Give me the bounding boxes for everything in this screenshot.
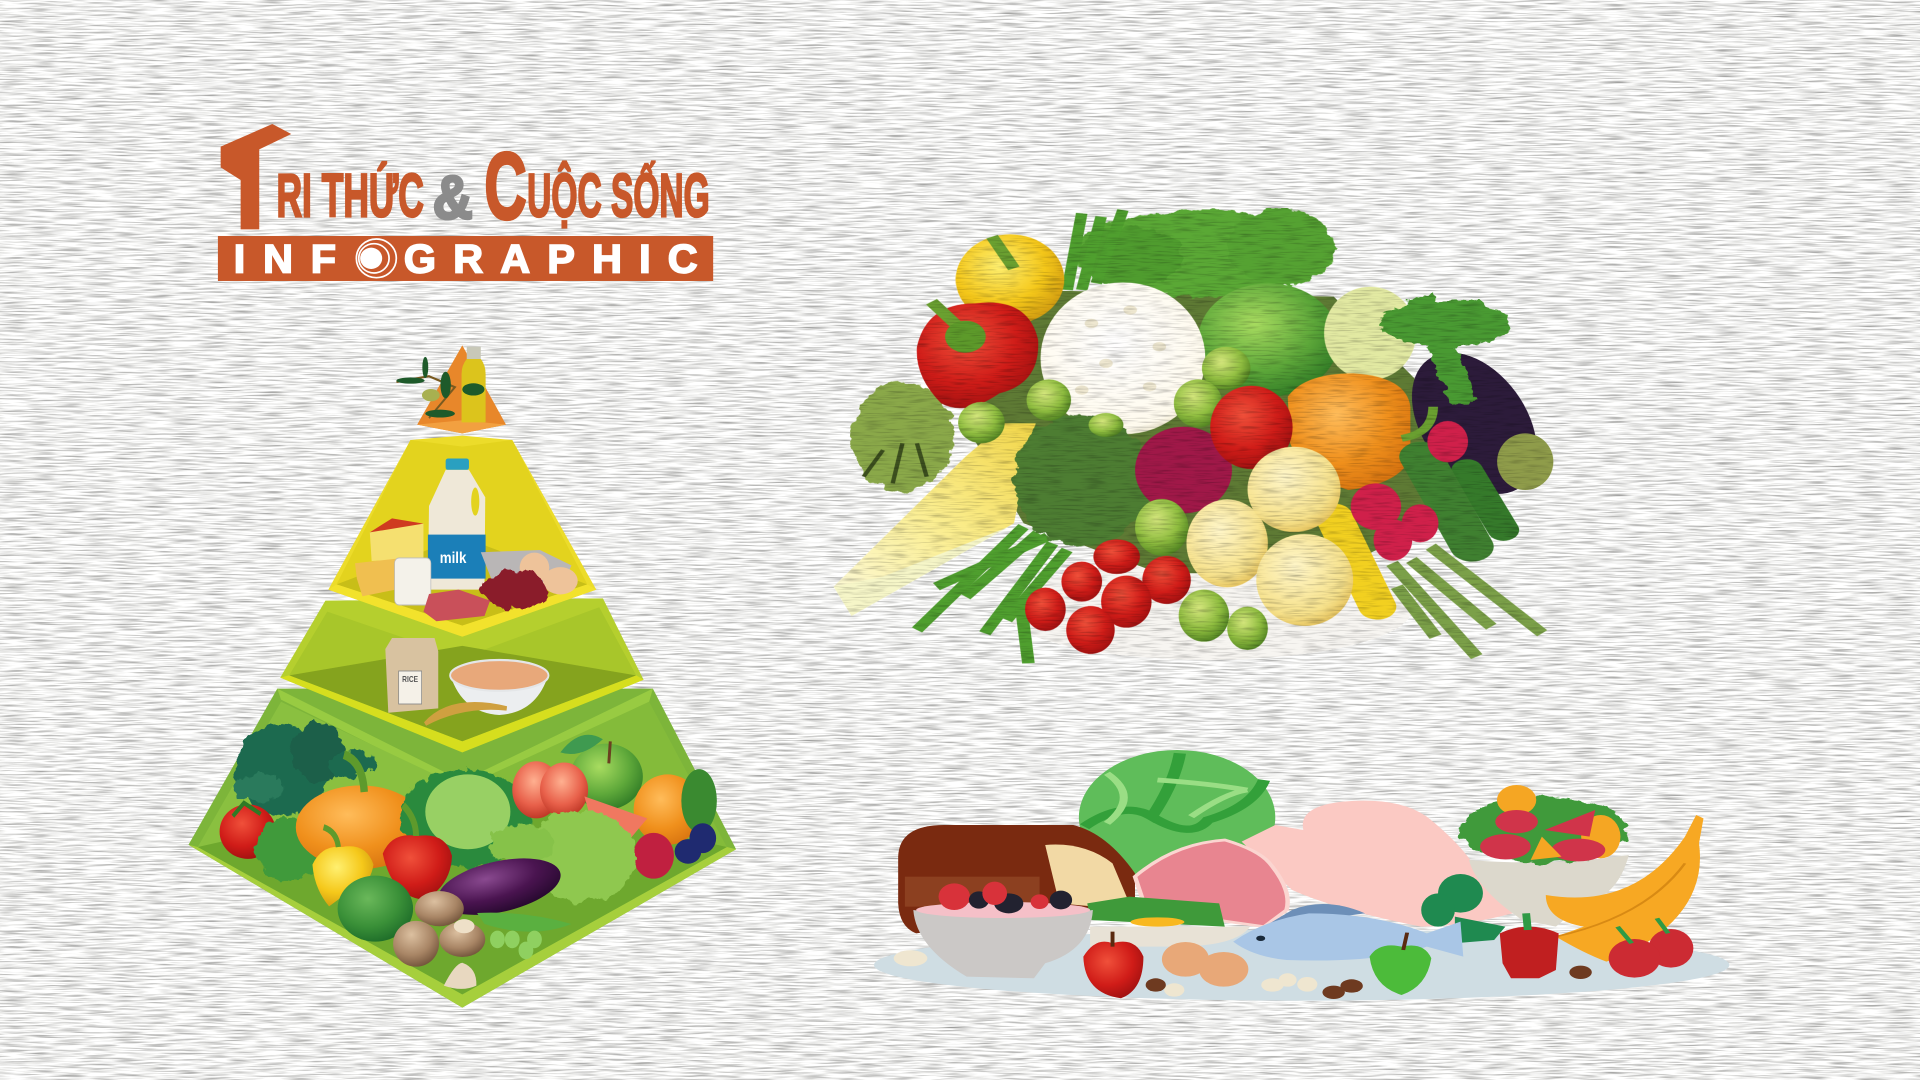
icon: green stalks: [1067, 210, 1123, 290]
icon: yellow squash: [1334, 517, 1377, 607]
icon: green pepper: [338, 876, 413, 942]
icon: orange: [634, 774, 702, 845]
icon: eggs: [520, 553, 578, 594]
icon: meat: [423, 590, 490, 621]
icon: cauliflower: [1041, 282, 1205, 434]
icon: mushrooms: [393, 891, 485, 989]
icon: asparagus: [1392, 547, 1542, 657]
icon: artichoke: [852, 382, 953, 492]
logo letter T: [221, 124, 291, 229]
icon: grapefruit: [584, 796, 647, 845]
icon: eggplant: [1388, 342, 1560, 505]
icon: bananas: [1546, 815, 1703, 962]
icon: eggplant calyx: [1497, 433, 1553, 490]
icon: beans: [482, 570, 547, 609]
icon: tomato: [220, 803, 276, 859]
band text: GRAPHIC: GRAPHIC: [404, 236, 698, 281]
icon: spiral O: [356, 239, 396, 278]
icon: potatoes: [1186, 447, 1353, 626]
icon: wheat: [425, 704, 507, 724]
icon: pumpkin: [296, 755, 425, 869]
infographic band: [218, 236, 713, 281]
logo ampersand: &: [433, 163, 473, 232]
icon: bread loaf: [898, 825, 1135, 933]
shadow under pile: [1004, 560, 1411, 660]
icon: raspberry: [633, 833, 674, 879]
band text: INF: INF: [234, 236, 336, 281]
pyramid tier: vegetables and fruit: [188, 689, 736, 1008]
icon: red pepper: [383, 805, 452, 900]
icon: rice bag: [385, 638, 438, 713]
icon: chicken: [1242, 801, 1525, 927]
icon: red onion: [1135, 427, 1232, 513]
icon: red bell pepper: [1500, 913, 1559, 978]
pyramid tier: oils: [396, 345, 506, 433]
icon: rice bag: RICE: [402, 674, 418, 684]
icon: peas: [477, 913, 571, 959]
icon: kale: [233, 722, 374, 816]
icon: eggs: [1162, 942, 1248, 987]
icon: fish: [1233, 904, 1463, 961]
icon: cabbage: [399, 770, 533, 867]
icon: meat: [1135, 840, 1288, 927]
icon: cherry tomatoes: [1025, 539, 1191, 654]
icon: oil bottle: [462, 347, 486, 422]
icon: savoy cabbage: [1198, 283, 1339, 397]
icon: red pepper: [917, 302, 1038, 408]
icon: yellow pepper: [312, 827, 374, 906]
icon: salad bowl: [1460, 785, 1629, 927]
icon: cucumbers: [1421, 457, 1503, 547]
icon: tomato: [1210, 386, 1293, 469]
icon: eggplant: [434, 849, 564, 925]
icon: broccoli: [1014, 413, 1150, 547]
icon: yellow pepper: [956, 234, 1064, 324]
pyramid tier: grains: [280, 598, 644, 752]
logo letter C: C: [484, 134, 526, 239]
icon: blueberries: [675, 823, 716, 864]
icon: kohlrabi: [1324, 287, 1416, 380]
icon: egg plate: [1087, 897, 1250, 947]
icon: lettuce: [488, 810, 636, 902]
icon: apple: [560, 735, 643, 810]
icon: corn: [834, 423, 1036, 616]
healthy food spread illustration: [874, 750, 1729, 1001]
icon: radishes: [1351, 421, 1468, 561]
icon: cheese: [370, 518, 423, 561]
pile backing fill: [961, 290, 1431, 573]
icon: leaf: [681, 769, 717, 832]
icon: broccoli: [255, 818, 323, 880]
icon: green beans: [917, 527, 1067, 663]
logo: Tri Thức & Cuộc Sống Infographic: [218, 124, 713, 281]
logo text: RI THỨC: RI THỨC: [276, 162, 424, 230]
vegetable pile photo: [834, 208, 1560, 663]
icon: milk jug: milk: [440, 550, 467, 568]
icon: rice bowl: [450, 660, 549, 715]
food pyramid: [188, 345, 736, 1008]
icon: lettuce back: [1072, 208, 1334, 297]
icon: nuts: [894, 950, 1592, 999]
icon: brussels sprouts: [958, 347, 1268, 650]
plate: [874, 929, 1729, 1001]
icon: fish fillet: [481, 550, 571, 590]
icon: orange pepper: [1288, 373, 1433, 490]
icon: peaches: [512, 761, 588, 818]
icon: breakfast bowl: [913, 882, 1093, 978]
icon: jar: [395, 558, 431, 605]
icon: butter: [355, 559, 396, 596]
icon: tomatoes: [1609, 918, 1693, 978]
icon: broccoli: [1421, 874, 1505, 943]
icon: cabbage: [1079, 750, 1275, 885]
icon: olive branch: [396, 357, 484, 418]
icon: green apple: [1370, 933, 1431, 995]
icon: kohlrabi leaves: [1380, 297, 1511, 403]
icon: red apple: [1083, 932, 1143, 998]
logo text: UỘC SỐNG: UỘC SỐNG: [527, 161, 710, 230]
icon: milk jug: [428, 458, 486, 590]
pyramid tier: dairy and protein: [328, 436, 596, 637]
